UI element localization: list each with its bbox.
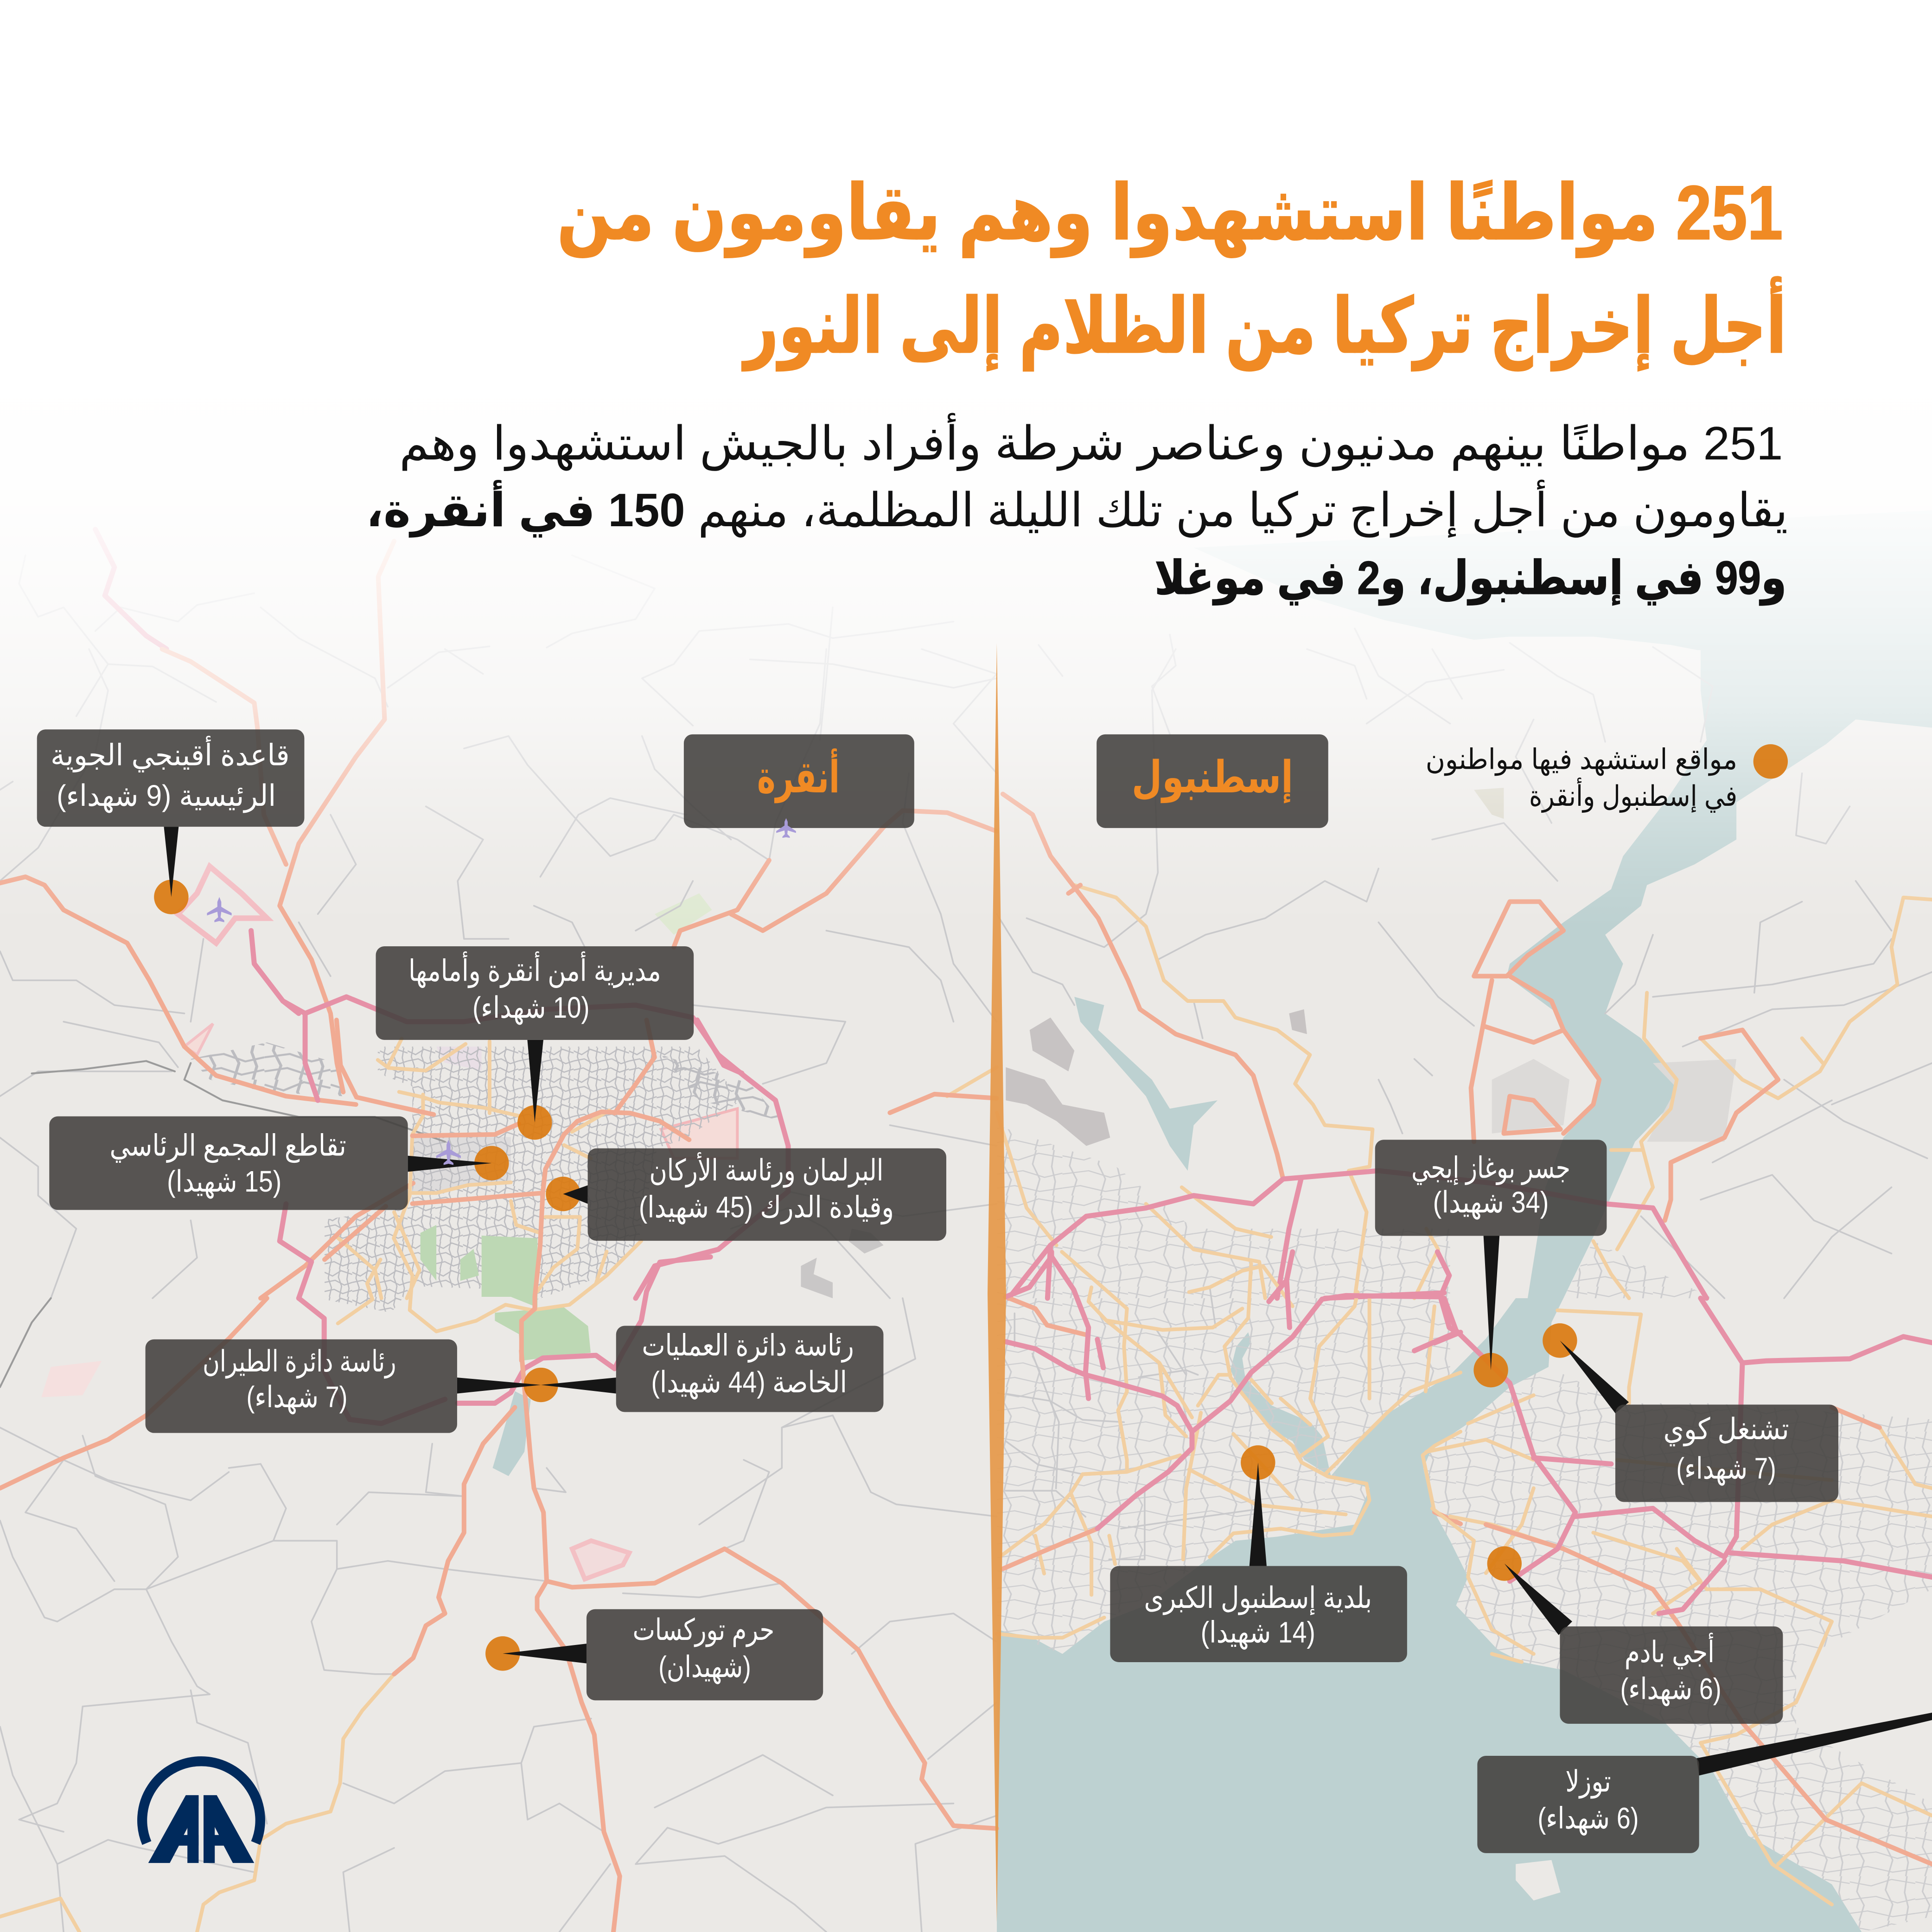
callout: Turkkes shrine: (شهيدان) — [658, 1650, 751, 1684]
callout: Bosphorus bridge: (34 شهيدا) — [1433, 1186, 1549, 1220]
title — [557, 170, 1786, 371]
map: faded north roads left — [19, 529, 997, 740]
map: Istanbul European side roads — [1003, 1252, 1460, 1595]
legend: في إسطنبول وأنقرة — [1529, 778, 1737, 813]
callout: Tuzla — [1477, 1713, 1932, 1853]
callout: Acibadem: أجي بادم — [1625, 1632, 1715, 1670]
heading: Istanbul: إسطنبول — [1132, 752, 1293, 803]
callout: Special operations department: رئاسة دائرة العمليات — [642, 1328, 854, 1363]
callout: Special operations department — [541, 1326, 883, 1412]
callout: Ankara police directorate: مديرية أمن أنقرة وأمامها — [408, 951, 661, 988]
intro text: 251 مواطنًا بينهم مدنيون وعناصر شرطة وأفراد بالجيش استشهدوا وهم — [399, 413, 1783, 471]
callout: Turkkes shrine: حرم توركسات — [633, 1613, 774, 1647]
map: parks and zones — [41, 788, 1504, 1579]
callout: Acibadem — [1487, 1546, 1783, 1724]
callout: Cengelkoy — [1543, 1323, 1838, 1502]
callout: Bosphorus bridge: جسر بوغاز إيجي — [1411, 1151, 1570, 1186]
callout: Presidential complex junction: (15 شهيدا) — [167, 1165, 281, 1199]
map: green parks Ankara — [421, 1225, 591, 1361]
callout: Akinci air base: قاعدة أقينجي الجوية — [51, 735, 290, 772]
callout: Parliament and General Staff: وقيادة الدرك (45 شهيدا) — [639, 1191, 894, 1225]
intro text: و99 في إسطنبول، و2 في موغلا — [1154, 552, 1786, 606]
callout: Special operations department: الخاصة (44 شهيدا) — [651, 1365, 847, 1400]
title: 251 مواطنًا استشهدوا وهم يقاومون من — [557, 170, 1783, 258]
divider spindle between Ankara and Istanbul — [988, 643, 1006, 1922]
callout: Presidential complex junction — [49, 1116, 509, 1210]
intro text — [366, 413, 1788, 606]
legend: مواقع استشهد فيها مواطنون — [1426, 743, 1737, 776]
map: Istanbul Asian side roads — [997, 1298, 1932, 1905]
callout: Tuzla: توزلا — [1565, 1765, 1611, 1799]
callout: Aviation department: (7 شهداء) — [247, 1380, 347, 1415]
map: Ankara south roads — [0, 1298, 997, 1932]
map: Ankara centre roads — [325, 1020, 742, 1403]
intro text: يقاومون من أجل إخراج تركيا من تلك الليلة المظلمة، منهم 150 في أنقرة، — [366, 479, 1788, 538]
callout: Ankara police directorate: (10 شهداء) — [472, 991, 590, 1025]
callout: Acibadem: (6 شهداء) — [1620, 1672, 1722, 1707]
logo: AA: A — [145, 1774, 253, 1884]
heading: Ankara — [684, 734, 914, 828]
callout: Cengelkoy: تشنغل كوي — [1664, 1412, 1789, 1447]
callout: Aviation department: رئاسة دائرة الطيران — [203, 1345, 396, 1379]
map: city street mesh — [191, 1042, 1932, 1932]
callout: Bosphorus bridge — [1375, 1140, 1607, 1387]
callout: Tuzla: (6 شهداء) — [1538, 1802, 1639, 1836]
map: Istanbul north roads — [997, 649, 1932, 1298]
map: top white fade — [0, 371, 1932, 927]
callout: Cengelkoy: (7 شهداء) — [1677, 1452, 1776, 1486]
callout: Akinci air base: الرئيسية (9 شهداء) — [57, 779, 276, 813]
callout: Istanbul municipality: بلدية إسطنبول الكبرى — [1144, 1581, 1372, 1615]
callout: Aviation department — [146, 1339, 558, 1433]
logo: AA — [142, 1761, 260, 1884]
callout: Istanbul municipality: (14 شهيدا) — [1201, 1615, 1315, 1650]
legend — [1426, 743, 1788, 813]
callout: Parliament and General Staff: البرلمان ورئاسة الأركان — [650, 1152, 883, 1188]
callout: Presidential complex junction: تقاطع المجمع الرئاسي — [110, 1129, 346, 1163]
map: Ankara north roads — [0, 649, 997, 1298]
callout: Parliament and General Staff — [546, 1148, 946, 1241]
logo: AA: A — [150, 1774, 258, 1884]
callout: Akinci air base — [37, 729, 304, 914]
map: water — [493, 510, 1932, 1932]
heading: Istanbul — [1097, 734, 1328, 828]
callout: Turkkes shrine — [485, 1609, 823, 1700]
heading: Ankara: أنقرة — [757, 748, 840, 803]
callout: Ankara police directorate — [376, 946, 694, 1140]
callout: Istanbul municipality — [1110, 1445, 1407, 1662]
map: faded north roads right — [1039, 628, 1713, 742]
icons: airports — [207, 818, 796, 1165]
